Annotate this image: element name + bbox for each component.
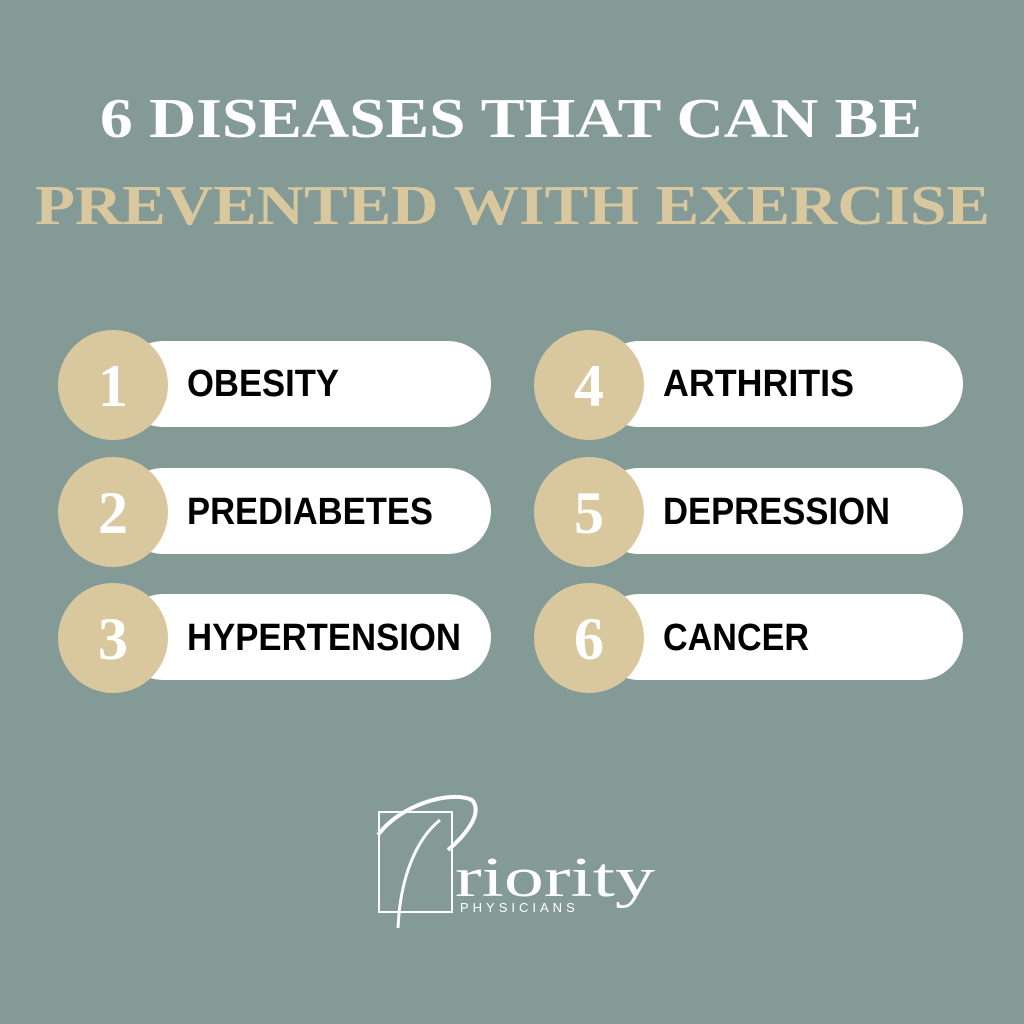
item 5: DEPRESSION [663, 491, 890, 533]
title [35, 88, 990, 237]
title: PREVENTED WITH EXERCISE [35, 175, 990, 237]
item 1: 1 [98, 353, 128, 419]
item 5: 5 [574, 480, 604, 546]
item 6 [534, 583, 963, 693]
item 1 [58, 330, 491, 440]
title: 6 DISEASES THAT CAN BE [100, 88, 922, 150]
item 4 [534, 330, 963, 440]
item 2: PREDIABETES [187, 491, 433, 533]
item 2 [58, 457, 491, 567]
item 5 [534, 457, 963, 567]
item 6: CANCER [663, 617, 809, 659]
logo: PHYSICIANS [460, 900, 579, 915]
item 4: ARTHRITIS [663, 363, 854, 405]
logo: riority [455, 847, 655, 909]
item 2: 2 [98, 480, 128, 546]
item 6: 6 [574, 606, 604, 672]
item 3: HYPERTENSION [187, 617, 461, 659]
logo [378, 797, 655, 928]
item 1: OBESITY [187, 363, 339, 405]
item 3: 3 [98, 606, 128, 672]
item 4: 4 [574, 353, 604, 419]
item 3 [58, 583, 491, 693]
